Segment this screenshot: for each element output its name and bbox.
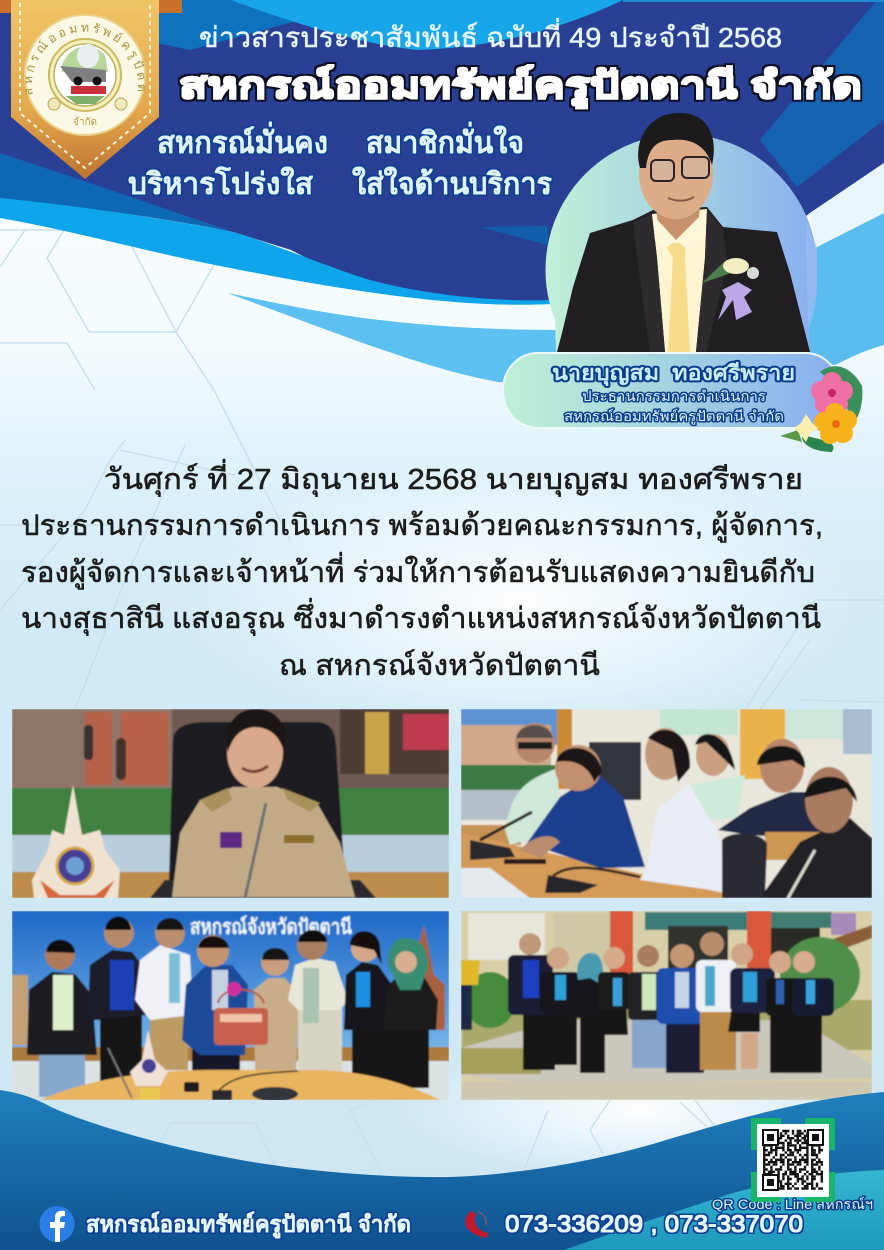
cooperative seal [24, 14, 146, 136]
dark blue corner wedge [760, 0, 884, 187]
dark wedge near portrait [480, 226, 548, 245]
cooperative seal: จำกัด [73, 117, 97, 128]
photo: group with gift basket: สหกรณ์จังหวัดปัตตานี [190, 915, 353, 939]
royal emblem [32, 785, 120, 898]
body text: รองผู้จัดการและเจ้าหน้าที่ ร่วมให้การต้อนรับแสดงความยินดีกับ [21, 552, 815, 590]
top header band [0, 0, 884, 305]
photo: meeting at table [461, 709, 872, 898]
body text: ประธานกรรมการดำเนินการ พร้อมด้วยคณะกรรมการ, ผู้จัดการ, [21, 510, 823, 543]
slogans [128, 122, 552, 201]
emblem [130, 1030, 168, 1086]
slogans: สมาชิกมั่นใจ [366, 122, 524, 160]
facebook page name: สหกรณ์ออมทรัพย์ครูปัตตานี จำกัด [86, 1211, 411, 1238]
body text: นางสุธาสินี แสงอรุณ ซึ่งมาดำรงตำแหน่งสหกรณ์จังหวัดปัตตานี [21, 598, 821, 636]
photo: group outside office [461, 911, 872, 1100]
body text: ณ สหกรณ์จังหวัดปัตตานี [279, 649, 600, 682]
light blue swoosh and pale band [227, 163, 884, 392]
phone numbers: 073-336209 , 073-337070 [505, 1211, 803, 1238]
slogans: ใส่ใจด้านบริการ [352, 167, 552, 201]
body text: วันศุกร์ ที่ 27 มิถุนายน 2568 นายบุญสม ทองศรีพราย [104, 459, 803, 497]
issue heading: ข่าวสารประชาสัมพันธ์ ฉบับที่ 49 ประจำปี 2568 [199, 18, 782, 53]
QR code [751, 1118, 835, 1202]
bright blue swoosh [0, 198, 552, 305]
portrait of chairman [545, 113, 818, 352]
dark blue wedge left [0, 153, 233, 232]
organisation title: สหกรณ์ออมทรัพย์ครูปัตตานี จำกัด [179, 65, 862, 109]
name plate [503, 353, 840, 428]
slogans: บริหารโปร่งใส [128, 166, 313, 201]
gift basket [214, 982, 268, 1045]
footer wave [0, 1090, 884, 1250]
name plate: ประธานกรรมการดำเนินการ [582, 388, 767, 404]
name plate: นายบุญสม ทองศรีพราย [552, 361, 795, 387]
slogans: สหกรณ์มั่นคง [157, 122, 328, 160]
icon: telephone [465, 1211, 489, 1238]
body text [21, 459, 823, 682]
name plate: สหกรณ์ออมทรัพย์ครูปัตตานี จำกัด [564, 408, 784, 425]
QR caption: QR Code : Line สหกรณ์ฯ [712, 1196, 873, 1212]
bright top arc [231, 0, 623, 50]
photo: provincial officer at desk [12, 709, 449, 898]
icon: facebook [40, 1206, 74, 1242]
badge ribbon with seal [0, 0, 182, 179]
corsage [702, 258, 759, 320]
photo: group with gift basket [12, 911, 449, 1100]
icon: tropical flowers [780, 366, 862, 452]
